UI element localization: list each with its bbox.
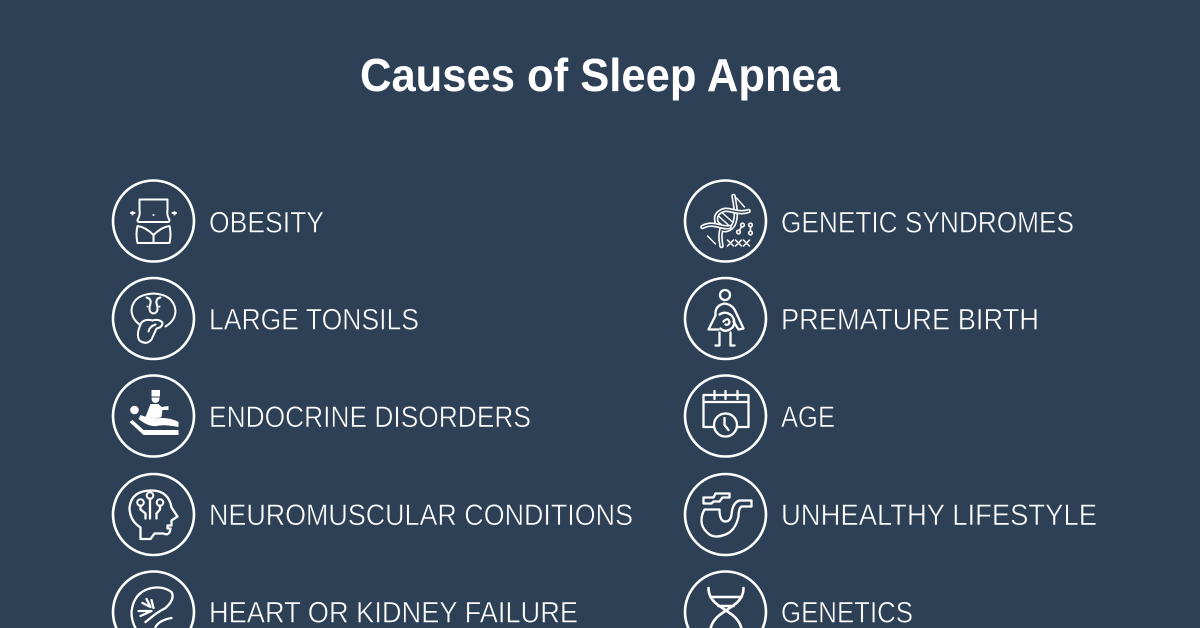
label: GENETIC SYNDROMES (781, 206, 1074, 240)
label: NEUROMUSCULAR CONDITIONS (209, 499, 633, 532)
label: LARGE TONSILS (209, 304, 419, 337)
item: genetic syndromes (685, 180, 1074, 262)
label: PREMATURE BIRTH (781, 304, 1039, 337)
icon: head with circuits (113, 474, 194, 555)
item: endocrine disorders (113, 376, 531, 456)
item: unhealthy lifestyle (685, 474, 1097, 555)
icon: dna helix (685, 572, 766, 628)
label: UNHEALTHY LIFESTYLE (781, 499, 1097, 532)
icon: mouth and tongue (113, 278, 194, 359)
icon: doctor and patient (113, 376, 194, 456)
label: AGE (781, 401, 835, 434)
item: heart or kidney failure (113, 572, 578, 628)
icon: kidney (113, 572, 194, 628)
label: OBESITY (209, 206, 324, 240)
icon: smoking pipe (685, 474, 766, 555)
icon: waist and hips (113, 180, 194, 262)
icon: calendar and clock (685, 376, 766, 456)
item: obesity (113, 180, 324, 262)
item: large tonsils (113, 278, 419, 359)
icon: pregnant woman (685, 278, 766, 359)
title: Causes of Sleep Apnea (360, 49, 840, 101)
item: premature birth (685, 278, 1039, 359)
item: neuromuscular conditions (113, 474, 633, 555)
item: age (685, 376, 835, 456)
icon: dna strand and chromosomes (685, 180, 766, 262)
label: ENDOCRINE DISORDERS (209, 401, 531, 434)
item: genetics (685, 572, 913, 628)
